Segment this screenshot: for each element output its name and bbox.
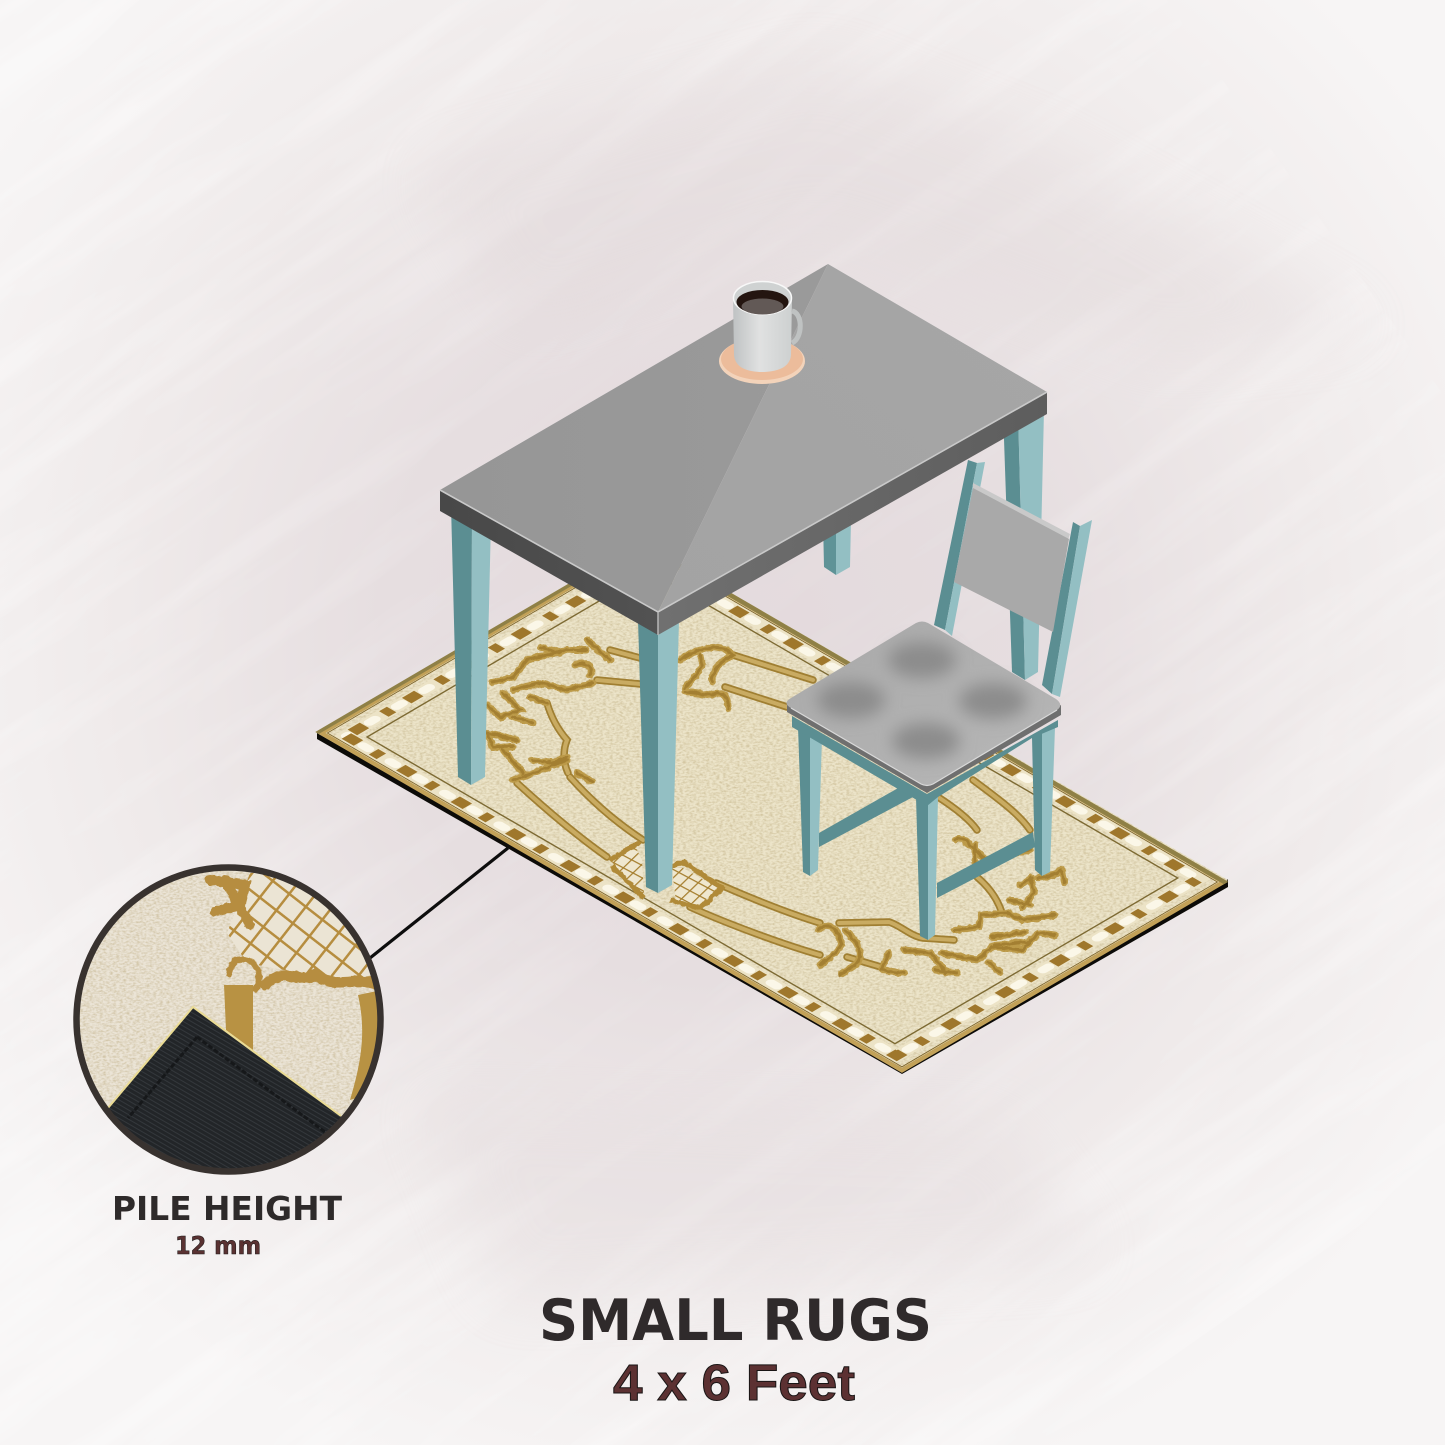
chair seat cushion xyxy=(786,622,1060,786)
rug lattice medallion xyxy=(610,842,722,908)
table top right facet xyxy=(658,264,1047,612)
chair back panel xyxy=(954,483,1070,632)
table front leg xyxy=(638,620,679,893)
pile height value: 12 mm xyxy=(175,1231,261,1260)
detail lens: pile height xyxy=(73,864,384,1175)
title size: 4 x 6 Feet xyxy=(613,1354,855,1411)
table right side face xyxy=(658,392,1047,635)
chair right back post xyxy=(1042,520,1092,697)
mug handle xyxy=(792,311,800,343)
chair seat dimples xyxy=(817,642,1027,759)
chair xyxy=(786,460,1092,940)
table left side face xyxy=(440,490,658,635)
coffee mug on coaster xyxy=(719,282,805,384)
chair seat rail xyxy=(792,716,1058,806)
rug face xyxy=(317,542,1228,1068)
table xyxy=(440,264,1047,893)
rug central ornament frame xyxy=(517,650,1030,967)
title heading: SMALL RUGS xyxy=(539,1288,932,1354)
pile height label xyxy=(112,1189,342,1260)
title xyxy=(539,1288,932,1411)
pile height heading: PILE HEIGHT xyxy=(112,1189,342,1228)
lens gold leaves xyxy=(210,880,378,990)
lens lattice xyxy=(227,872,370,978)
chair seat side xyxy=(787,702,1061,793)
connector line from rug to detail lens xyxy=(370,848,508,958)
chair left leg xyxy=(798,727,822,876)
rug xyxy=(317,542,1228,1074)
table left leg xyxy=(451,505,491,785)
lens gold columns xyxy=(224,985,382,1100)
lens folded black backing xyxy=(108,1006,342,1168)
chair stretcher left xyxy=(819,787,913,847)
chair front leg xyxy=(916,797,938,940)
coaster xyxy=(719,338,805,384)
lens rug surface xyxy=(80,870,378,1116)
mug rim xyxy=(734,282,792,314)
chair right leg xyxy=(1032,727,1055,876)
mug body xyxy=(733,298,792,372)
table right back leg xyxy=(1003,410,1044,680)
chair left back post xyxy=(934,460,985,636)
table top left facet xyxy=(440,264,828,612)
table rear leg xyxy=(823,520,851,575)
coffee xyxy=(736,290,788,314)
chair stretcher right xyxy=(937,832,1035,898)
rug border with beads xyxy=(317,542,1228,1073)
lens ring xyxy=(76,868,380,1172)
rug underside thickness xyxy=(317,733,1228,1074)
table top edge highlight xyxy=(440,392,1047,612)
rug baroque scrollwork clusters xyxy=(487,640,1065,975)
